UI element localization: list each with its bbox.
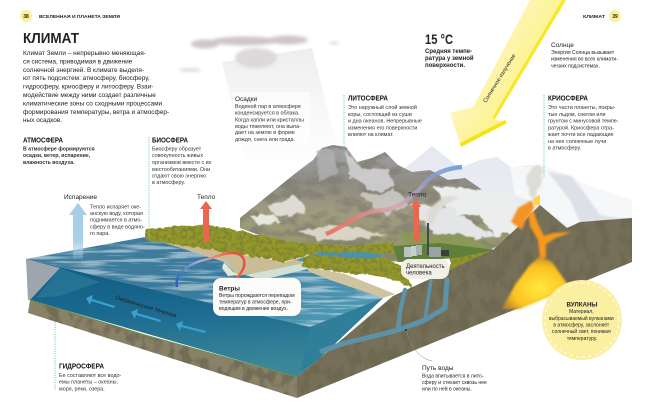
volcanoes callout xyxy=(542,280,622,360)
solar radiation arrow xyxy=(450,0,566,147)
volcanoes callout: в атмосферу, заслоняет xyxy=(553,323,610,329)
coast sand xyxy=(143,236,395,298)
volcanoes callout: температуру. xyxy=(567,336,597,342)
cryosphere block: жает почти все падающие xyxy=(548,132,614,138)
ocean current label: Океанические течения xyxy=(114,295,177,319)
water path block xyxy=(422,365,488,393)
dotted leader lines xyxy=(55,95,544,390)
lithosphere block: изменения его поверхности xyxy=(348,125,417,131)
atmosphere block: осадки, ветер, испарение, xyxy=(23,153,91,159)
evaporation label: Испарение xyxy=(64,194,98,201)
winds callout: Ветры порождаются перепадом xyxy=(219,293,295,299)
title: КЛИМАТ xyxy=(23,31,79,47)
evaporation text: сферу в виде водяно- xyxy=(90,224,145,230)
temperature stat: поверхности. xyxy=(425,63,465,69)
biosphere block: Биосферу образует xyxy=(152,146,202,152)
intro text: климатические зоны со сходными процессами xyxy=(23,100,163,107)
cryosphere block: на нее солнечные лучи xyxy=(548,139,606,145)
water path block: Путь воды xyxy=(422,365,454,372)
sun block: Солнце xyxy=(551,42,574,49)
sun block: Энергия Солнца вызывает xyxy=(551,50,615,56)
lithosphere block xyxy=(348,96,423,138)
lithosphere block: коры, состоящий из суши xyxy=(348,111,412,118)
intro text: модействие между ними создает различные xyxy=(23,91,156,99)
sun block xyxy=(551,42,619,70)
hydrosphere block xyxy=(59,364,123,392)
precipitation block xyxy=(233,92,310,144)
heat label lithosphere: Тепло xyxy=(408,192,427,198)
page header right: КЛИМАТ xyxy=(583,14,605,20)
page header left xyxy=(20,10,120,22)
intro text: ся система, приводимая в движение xyxy=(23,58,133,65)
atmosphere block: влажность воздуха. xyxy=(23,160,75,166)
precipitation block: воды тяжелеют, она выпа- xyxy=(235,124,301,130)
water path block: или по ней в океаны. xyxy=(422,386,472,393)
forest xyxy=(145,225,495,288)
water path block: сферу и стекает сквозь нее xyxy=(422,380,487,386)
intro text: гидросферу, криосферу и литосферу. Взаи- xyxy=(23,84,153,91)
volcanoes callout: выбрасываемый вулканами xyxy=(549,315,614,322)
volcano smoke xyxy=(526,165,543,198)
lithosphere block: влияют на климат. xyxy=(348,132,394,138)
evaporation text: Тепло испаряет оке- xyxy=(90,204,141,210)
lithosphere block: ЛИТОСФЕРА xyxy=(348,96,388,102)
precipitation block: Когда капли или кристаллы xyxy=(235,117,304,123)
precipitation block: Водяной пар в атмосфере xyxy=(235,103,301,110)
clouds and rain xyxy=(179,36,339,180)
volcanoes callout: Материал, xyxy=(569,309,594,315)
human activity callout xyxy=(401,259,449,279)
left sediment face xyxy=(28,300,297,398)
lithosphere block: и дна океанов. Непрерывные xyxy=(348,119,422,125)
ocean current arrows xyxy=(86,295,206,333)
atmosphere block: АТМОСФЕРА xyxy=(23,138,63,144)
intro text: ют пять подсистем: атмосферу, биосферу, xyxy=(23,74,150,82)
atmosphere block xyxy=(23,138,96,166)
snow slope right xyxy=(548,172,632,222)
lagoon xyxy=(296,252,382,266)
intro text: Климат Земли – непрерывно меняющая- xyxy=(23,50,146,57)
lithosphere block: Это наружный слой земной xyxy=(348,104,417,111)
winds callout xyxy=(213,278,301,316)
biosphere block: БИОСФЕРА xyxy=(152,138,188,144)
evaporation text: анскую воду, которая xyxy=(90,211,143,217)
cryosphere block: КРИОСФЕРА xyxy=(548,96,588,102)
heat arrow biosphere xyxy=(200,201,212,242)
cryosphere block: Это части планеты, покры- xyxy=(548,105,616,111)
biosphere block: отдают свою энергию xyxy=(152,174,206,180)
winds callout: водящим в движение воздух. xyxy=(219,306,288,312)
page header right xyxy=(583,10,621,22)
sun block: изменения во всех климати- xyxy=(551,56,618,62)
groundwater channels xyxy=(322,280,447,351)
hydrosphere block: моря, реки, озера. xyxy=(59,386,105,392)
cryosphere block: грунтом с минусовой темпе- xyxy=(548,118,619,124)
precipitation block: Осадки xyxy=(235,96,258,103)
temperature stat: Средняя темпе- xyxy=(425,49,472,55)
intro text: солнечной энергией. В климате выделя- xyxy=(23,66,144,74)
winds callout: температур в атмосфере, при- xyxy=(219,300,292,306)
factory smoke xyxy=(425,196,460,226)
cryosphere block xyxy=(548,96,620,152)
biosphere block: местообитаниями. Они xyxy=(152,167,210,173)
intro text: формирования температуры, ветра и атмосфер- xyxy=(23,109,169,116)
human activity callout: Деятельность xyxy=(406,264,445,270)
human activity callout: человека xyxy=(406,270,432,276)
ocean surface xyxy=(26,237,383,327)
precipitation block: дает на землю в форме xyxy=(235,130,295,136)
biosphere block: организмов вместе с их xyxy=(152,160,212,166)
volcanoes callout: солнечный свет, понижая xyxy=(552,328,611,335)
mountains back: snow xyxy=(405,146,632,265)
biosphere block: совокупность живых xyxy=(152,153,203,159)
precipitation block: дождя, снега или града. xyxy=(235,137,295,143)
factory xyxy=(404,223,449,257)
ocean front cut: water xyxy=(26,259,383,377)
heat label biosphere: Тепло xyxy=(197,194,216,201)
page header left: ВСЕЛЕННАЯ И ПЛАНЕТА ЗЕМЛЯ xyxy=(39,14,120,20)
heat arrow factory xyxy=(411,199,421,242)
evaporation text: поднимается в атмо- xyxy=(90,218,142,224)
water path leader xyxy=(405,329,432,361)
evaporation text: го пара. xyxy=(90,231,110,237)
temperature stat xyxy=(425,31,475,69)
sun block: ческих подсистемах. xyxy=(551,64,600,70)
cryosphere block: в атмосферу. xyxy=(548,146,581,152)
volcanoes callout: ВУЛКАНЫ xyxy=(567,302,597,308)
water path block: Вода впитывается в лито- xyxy=(422,374,484,380)
mountains front: rock and meadow xyxy=(240,145,632,262)
cryosphere block: тые льдом, снегом или xyxy=(548,112,606,118)
right soil face xyxy=(297,205,632,398)
precipitation block: конденсируется в облака. xyxy=(235,111,299,117)
volcano lava xyxy=(502,195,572,309)
wind arrow over land xyxy=(326,167,462,234)
hydrosphere block: Ее составляют все водо- xyxy=(59,373,121,379)
temperature stat: ратура у земной xyxy=(425,55,474,62)
atmosphere block: В атмосфере формируются xyxy=(23,146,95,152)
winds callout: Ветры xyxy=(219,286,240,292)
page header right: 39 xyxy=(612,14,618,20)
hydrosphere block: ГИДРОСФЕРА xyxy=(59,364,104,370)
solar radiation arrow: Солнечное излучение xyxy=(483,53,517,104)
temperature stat: 15 °C xyxy=(425,31,453,47)
green field by the factory xyxy=(393,243,495,262)
intro text: ных осадков. xyxy=(23,117,62,124)
evaporation arrow xyxy=(69,203,87,259)
hydrosphere block: емы планеты – океаны, xyxy=(59,380,119,386)
wind arrow over ocean xyxy=(177,253,244,287)
biosphere block: в атмосферу. xyxy=(152,180,185,186)
page header left: 38 xyxy=(23,14,29,20)
biosphere block xyxy=(152,138,213,186)
cryosphere block: ратурой. Криосфера отра- xyxy=(548,124,614,131)
